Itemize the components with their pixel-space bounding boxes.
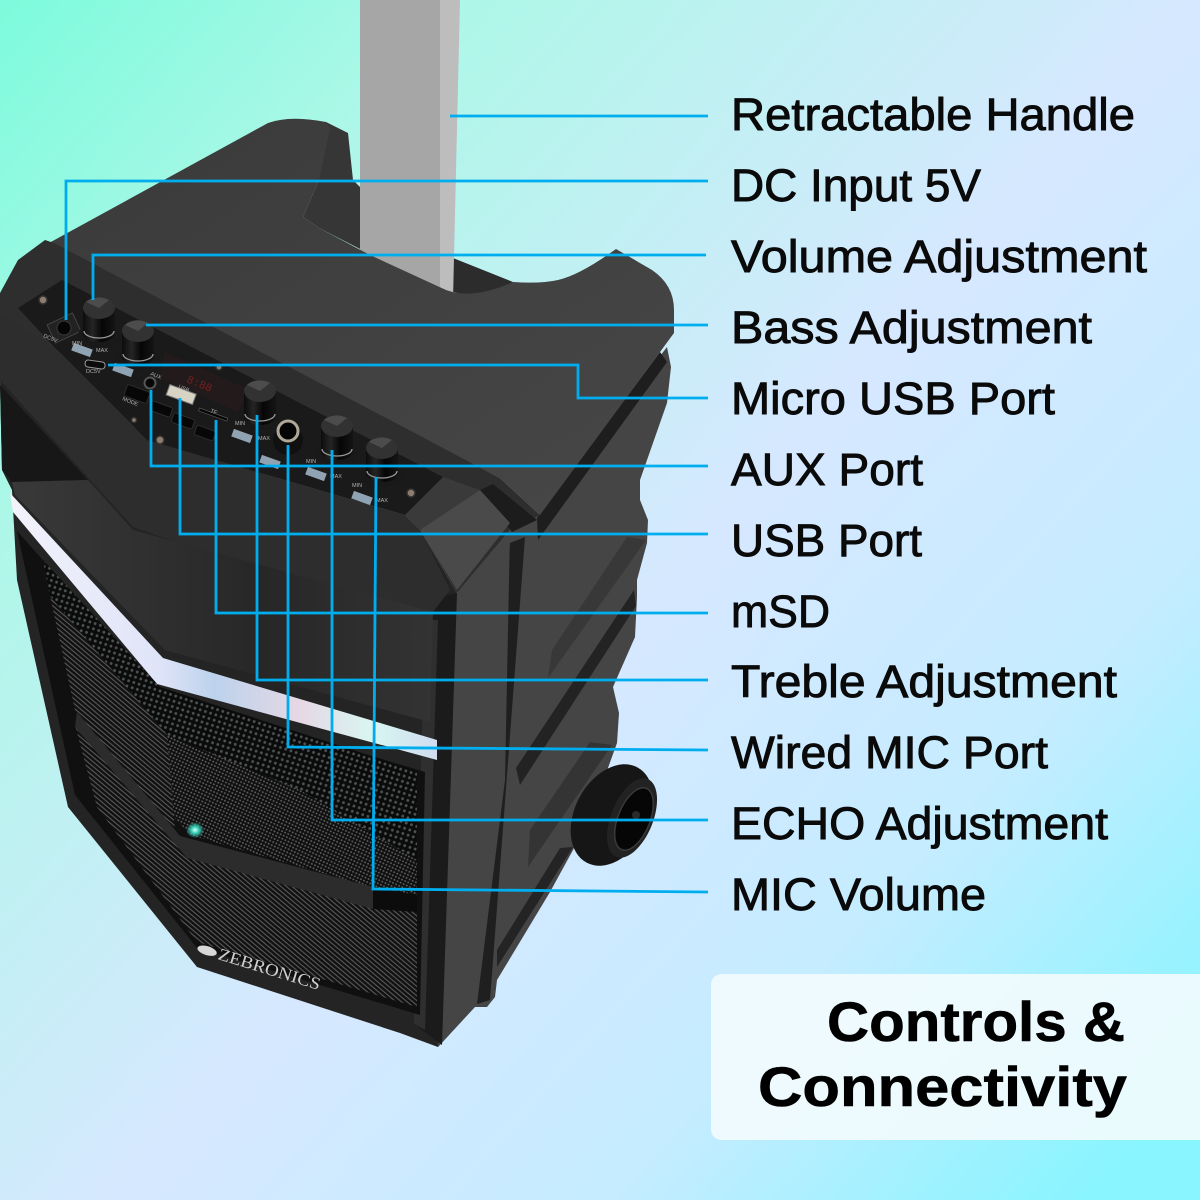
LED indicator xyxy=(186,822,204,838)
side recess upper xyxy=(548,537,646,678)
callout panel xyxy=(711,974,1200,1140)
knob: mic volume xyxy=(361,437,403,487)
panel micro labels: TF xyxy=(209,408,218,417)
upper recessed front panel xyxy=(12,480,433,722)
handle side face xyxy=(440,0,460,300)
illuminated light strip xyxy=(10,493,437,760)
panel micro labels: MIN xyxy=(352,483,362,489)
mesh grille main xyxy=(43,560,417,900)
pillar inner rim xyxy=(414,620,438,1030)
wheel hub xyxy=(607,782,661,856)
label: DC input: DC Input 5V xyxy=(731,160,981,211)
top surface xyxy=(49,119,674,515)
line: bass xyxy=(146,324,708,326)
display digits: 8:88 xyxy=(185,375,213,396)
wired mic jack xyxy=(273,421,303,455)
panel buttons xyxy=(124,384,216,441)
line: USB xyxy=(180,398,708,534)
label: volume: Volume Adjustment xyxy=(731,231,1148,282)
handle shadow well xyxy=(446,258,513,297)
panel micro labels: DC5V xyxy=(42,333,58,344)
wheel xyxy=(554,750,670,880)
panel micro labels: USB xyxy=(177,384,190,394)
chevron shadow xyxy=(373,887,417,912)
title callout xyxy=(711,974,1200,1140)
label: micro USB: Micro USB Port xyxy=(731,373,1056,424)
knob: bass xyxy=(117,320,159,370)
grille chevron band xyxy=(75,712,373,909)
line: volume xyxy=(93,255,706,300)
AUX port xyxy=(144,378,156,388)
side groove upper xyxy=(537,352,667,540)
panel micro labels xyxy=(42,333,388,504)
line: micro USB xyxy=(108,365,708,398)
wheel rim xyxy=(597,771,667,865)
label: treble: Treble Adjustment xyxy=(731,656,1118,707)
dark wedge left xyxy=(0,385,88,482)
leader lines xyxy=(66,116,708,892)
label: mSD: mSD xyxy=(731,586,830,637)
line: treble xyxy=(257,415,708,680)
title line 2: Connectivity xyxy=(758,1055,1127,1118)
mesh grille lower xyxy=(75,725,417,1007)
mesh grille top band xyxy=(43,560,417,860)
DC input port xyxy=(47,313,81,343)
side panel silhouette xyxy=(438,347,671,1047)
blue-grey control tags xyxy=(71,343,373,505)
micro USB port xyxy=(85,360,105,369)
panel micro labels: MIN xyxy=(235,421,245,427)
panel micro labels: MAX xyxy=(96,348,108,354)
LED display xyxy=(160,352,250,412)
brand logo xyxy=(195,938,323,994)
knob: treble xyxy=(239,380,281,430)
panel micro labels: MIN xyxy=(72,341,82,347)
brand name: ZEBRONICS xyxy=(216,945,323,994)
side vertical channel xyxy=(477,537,525,1004)
title line 1: Controls & xyxy=(827,990,1125,1053)
front bevel band xyxy=(0,313,450,612)
label: retractable handle: Retractable Handle xyxy=(731,89,1135,140)
mesh grille left stripes xyxy=(50,596,175,830)
line: AUX xyxy=(151,390,708,466)
side bottom dark edge xyxy=(497,847,573,967)
screws xyxy=(39,296,415,497)
line: retractable handle xyxy=(450,115,708,117)
pillar dark strip xyxy=(415,593,457,1045)
hub bolt xyxy=(632,811,640,819)
side recess lower xyxy=(528,742,612,867)
label: mic volume: MIC Volume xyxy=(731,869,986,920)
line: mSD xyxy=(216,420,708,613)
front corner pillar xyxy=(438,530,510,1047)
corner dark wedge xyxy=(480,484,537,532)
label: bass: Bass Adjustment xyxy=(731,302,1093,353)
knob: echo xyxy=(316,415,358,465)
control panel xyxy=(18,280,443,515)
USB port xyxy=(166,385,196,404)
knob: volume xyxy=(78,297,120,347)
lower front body xyxy=(0,380,457,1047)
mSD slot xyxy=(199,408,228,421)
panel micro labels: MAX xyxy=(330,474,342,480)
grille frame xyxy=(17,531,425,1015)
line: mic volume xyxy=(373,477,708,892)
line: wired mic xyxy=(288,445,708,750)
panel micro labels: MAX xyxy=(376,498,388,504)
handle front face xyxy=(360,0,442,300)
front lip band xyxy=(0,240,540,593)
panel micro labels: MIN xyxy=(306,459,316,465)
line: DC input xyxy=(66,181,708,320)
icon: brand mark xyxy=(196,943,218,958)
rear wall behind handle xyxy=(300,122,362,250)
panel micro labels: DC5V xyxy=(86,369,101,375)
corner facet shoulder xyxy=(405,477,480,530)
speaker product illustration xyxy=(0,0,674,1047)
feature labels xyxy=(731,89,1148,920)
label: USB: USB Port xyxy=(731,515,923,566)
label: wired mic: Wired MIC Port xyxy=(731,727,1049,778)
panel micro labels: AUX xyxy=(149,371,162,381)
wheel tire xyxy=(554,750,670,880)
label: AUX: AUX Port xyxy=(731,444,924,495)
label: echo: ECHO Adjustment xyxy=(731,798,1108,849)
panel micro labels: MAX xyxy=(258,436,270,442)
panel micro labels: MODE xyxy=(121,396,139,408)
line: echo xyxy=(332,450,708,820)
retractable handle xyxy=(360,0,460,300)
corner light facet xyxy=(420,490,510,590)
side groove lower xyxy=(516,590,636,785)
